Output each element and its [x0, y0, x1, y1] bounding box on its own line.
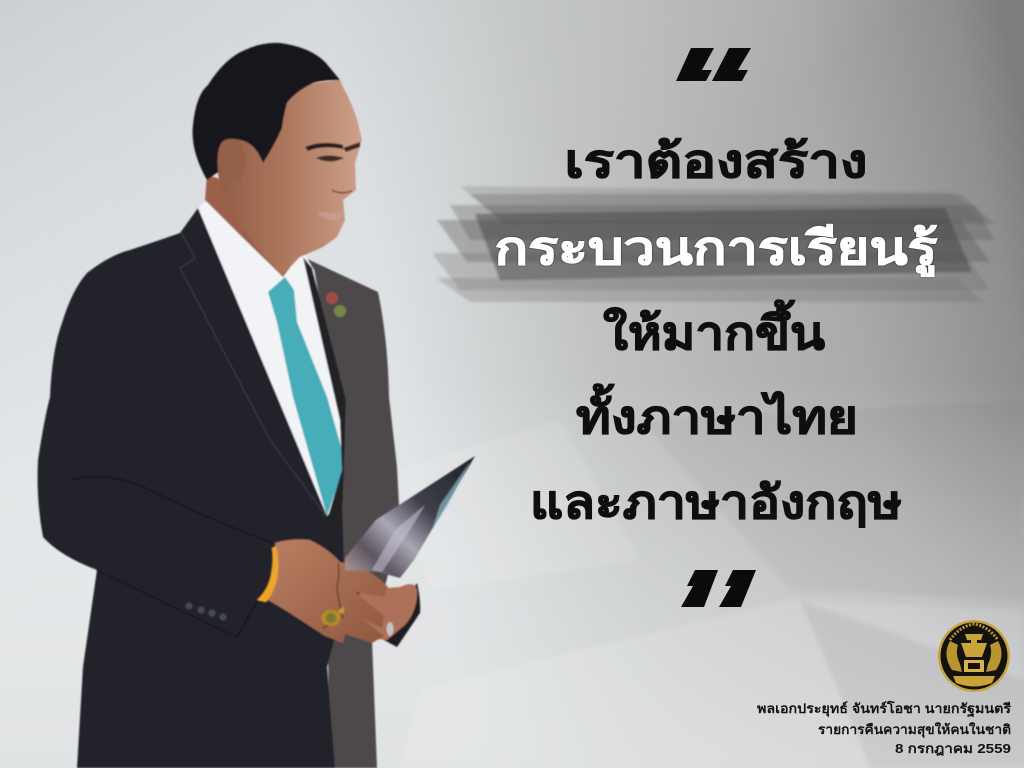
gold ring	[321, 606, 344, 626]
yellow wristband	[257, 546, 278, 602]
hair	[193, 43, 340, 180]
speaker name: พลเอกประยุทธ์ จันทร์โอชา นายกรัฐมนตรี	[757, 700, 1011, 718]
jacket right panel	[303, 257, 400, 768]
banner: layered grey brush band	[432, 186, 995, 302]
eye, brow, nose and mouth	[305, 142, 360, 220]
line 2 highlighted: กระบวนการเรียนรู้	[494, 222, 938, 277]
headline quote text	[494, 135, 938, 528]
neck	[205, 175, 303, 277]
line 3: ให้มากขึ้น	[603, 299, 826, 359]
lapel notch highlight	[180, 232, 326, 516]
quote mark: closing	[681, 570, 756, 607]
ear	[219, 139, 247, 182]
attribution text	[757, 700, 1011, 757]
sleeve crease	[70, 477, 273, 637]
emblem: government seal	[938, 620, 1010, 692]
lapel pins	[326, 292, 346, 317]
date: 8 กรกฎาคม 2559	[895, 741, 1011, 757]
jacket lapel shading	[303, 257, 346, 600]
person: portrait	[38, 43, 475, 768]
line 4: ทั้งภาษาไทย	[576, 383, 858, 443]
tie	[268, 277, 342, 516]
line 5: และภาษาอังกฤษ	[530, 476, 902, 528]
face	[212, 80, 362, 275]
line 1: เราต้องสร้าง	[564, 135, 868, 187]
sleeve buttons	[186, 602, 226, 620]
far hand and cuff	[355, 583, 420, 647]
jacket body	[38, 208, 345, 768]
silver ring	[386, 622, 394, 636]
quote mark: opening	[676, 48, 751, 81]
programme name: รายการคืนความสุขให้คนในชาติ	[818, 721, 1011, 738]
neck and shirt	[198, 195, 343, 516]
hand	[268, 539, 388, 643]
trophy	[345, 456, 475, 578]
